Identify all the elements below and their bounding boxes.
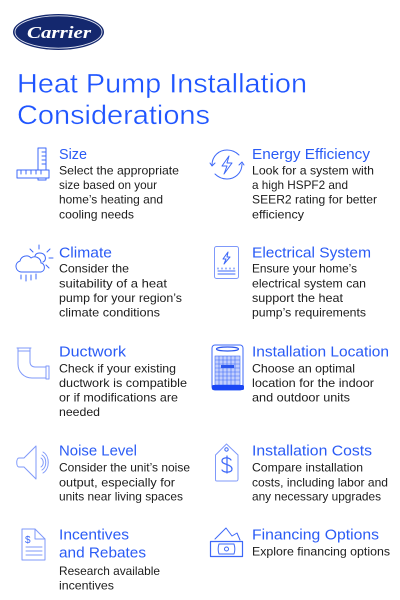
text block: and outdoor units [252, 391, 350, 405]
text block: Consider the [59, 262, 129, 276]
text block: efficiency [252, 207, 304, 221]
panel: ductwork [17, 345, 187, 419]
title: Considerations [17, 100, 210, 130]
text block [59, 461, 190, 504]
text block: a high HSPF2 and [252, 178, 348, 192]
panel: noise level [17, 444, 190, 504]
heading: and Rebates [59, 546, 146, 562]
heading: Installation Location [252, 345, 389, 361]
text block: or if modifications are [59, 391, 178, 405]
text block: Select the appropriate [59, 163, 179, 177]
logo: Carrier [13, 14, 104, 50]
logo: Carrier: Carrier [27, 23, 91, 42]
heading: Energy Efficiency [252, 147, 371, 163]
text block: incentives [59, 579, 114, 593]
icon: cash bills [210, 528, 242, 556]
panel: size [17, 147, 179, 221]
text block: needed [59, 405, 100, 419]
text block: costs, including labor and [252, 475, 388, 489]
heading: Installation Costs [252, 444, 372, 460]
text block: Ensure your home’s [252, 262, 357, 276]
heading [59, 528, 146, 562]
text block [252, 461, 388, 504]
text block: cooling needs [59, 207, 134, 221]
text block: pump for your region’s [59, 291, 182, 305]
text block [59, 361, 187, 419]
text block: Research available [59, 564, 160, 578]
heading: Size [59, 147, 87, 163]
panel: climate [16, 245, 182, 320]
text block: size based on your [59, 178, 157, 192]
text block: Check if your existing [59, 361, 176, 375]
text block: electrical system can [252, 276, 366, 290]
text block: units near living spaces [59, 490, 183, 504]
heading: Incentives [59, 528, 129, 544]
panel: installation location [212, 345, 389, 405]
text block: pump’s requirements [252, 306, 366, 320]
text block: Look for a system with [252, 163, 374, 177]
heading: Financing Options [252, 528, 379, 544]
text block: Explore financing options [252, 545, 390, 559]
text block: Choose an optimal [252, 361, 355, 375]
icon: duct pipe [17, 348, 49, 379]
panel: energy efficiency [210, 147, 377, 221]
icon: electrical panel [214, 246, 238, 278]
text block [59, 564, 160, 593]
icon: speaker [17, 446, 48, 479]
text block: ductwork is compatible [59, 376, 187, 390]
text block: climate conditions [59, 306, 160, 320]
title [17, 69, 307, 130]
text block: output, especially for [59, 475, 175, 489]
icon: cloud, sun and rain [16, 245, 53, 281]
text block [252, 361, 374, 405]
text block: any necessary upgrades [252, 490, 381, 504]
panel: electrical system [214, 246, 371, 320]
text block: home’s heating and [59, 193, 163, 207]
text block: Compare installation [252, 461, 363, 475]
text block [252, 163, 377, 221]
title: Heat Pump Installation [17, 69, 307, 99]
icon: price tag [216, 444, 238, 481]
text block: location for the indoor [252, 376, 374, 390]
icon: outdoor AC unit [212, 345, 244, 390]
icon: bolt with cycle arrows [210, 150, 244, 179]
panel: incentives and rebates [22, 528, 160, 593]
heading: Electrical System [252, 246, 371, 262]
heading: Ductwork [59, 345, 127, 361]
text block: support the heat [252, 291, 344, 305]
panel: installation costs [216, 444, 388, 504]
text block [252, 262, 366, 320]
heading: Climate [59, 246, 112, 262]
text block: SEER2 rating for better [252, 193, 377, 207]
icon: document with dollar: $ [25, 535, 31, 546]
text block [59, 262, 182, 320]
text block: Consider the unit’s noise [59, 461, 190, 475]
text block: suitability of a heat [59, 276, 168, 290]
heading: Noise Level [59, 444, 137, 460]
panel: financing options [210, 528, 390, 559]
icon: ruler square [17, 148, 49, 180]
text block [59, 163, 179, 221]
